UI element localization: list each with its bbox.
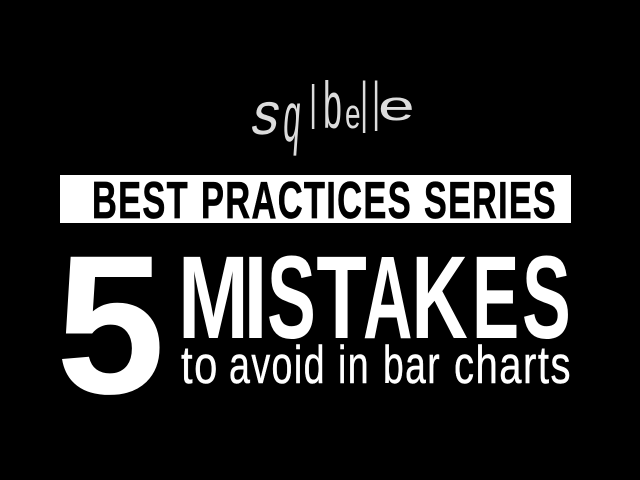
subtitle <box>181 336 572 395</box>
logo: sqlbelle handwritten: b <box>323 69 342 143</box>
logo: sqlbelle handwritten: l <box>373 69 379 147</box>
logo: sqlbelle handwritten <box>246 68 415 156</box>
headline: mistakes: E <box>472 231 519 363</box>
headline: mistakes: A <box>363 233 412 364</box>
banner heading: BEST <box>92 172 189 230</box>
subtitle: charts <box>454 336 572 395</box>
banner heading: PRACTICES <box>201 172 412 230</box>
subtitle: bar <box>383 336 441 395</box>
headline: mistakes: S <box>267 231 316 363</box>
logo: sqlbelle handwritten: l <box>361 68 367 149</box>
logo: sqlbelle handwritten: q <box>281 78 304 156</box>
logo: sqlbelle handwritten: e <box>378 82 415 129</box>
headline: mistakes: T <box>316 231 367 363</box>
banner heading: SERIES <box>424 172 557 230</box>
subtitle: avoid <box>229 336 326 395</box>
headline: mistakes <box>178 231 571 364</box>
series banner <box>60 172 571 230</box>
big numeral 5: 5 <box>56 214 165 435</box>
headline: mistakes: S <box>522 231 571 363</box>
headline: mistakes: I <box>244 231 267 363</box>
logo: sqlbelle handwritten: e <box>345 90 361 137</box>
subtitle: to <box>181 336 219 395</box>
banner heading <box>92 172 557 230</box>
headline: mistakes: K <box>412 232 468 364</box>
logo: sqlbelle handwritten: s <box>246 81 287 147</box>
logo: sqlbelle handwritten: l <box>310 74 316 143</box>
subtitle: in <box>338 336 370 395</box>
headline: mistakes: M <box>178 231 249 363</box>
